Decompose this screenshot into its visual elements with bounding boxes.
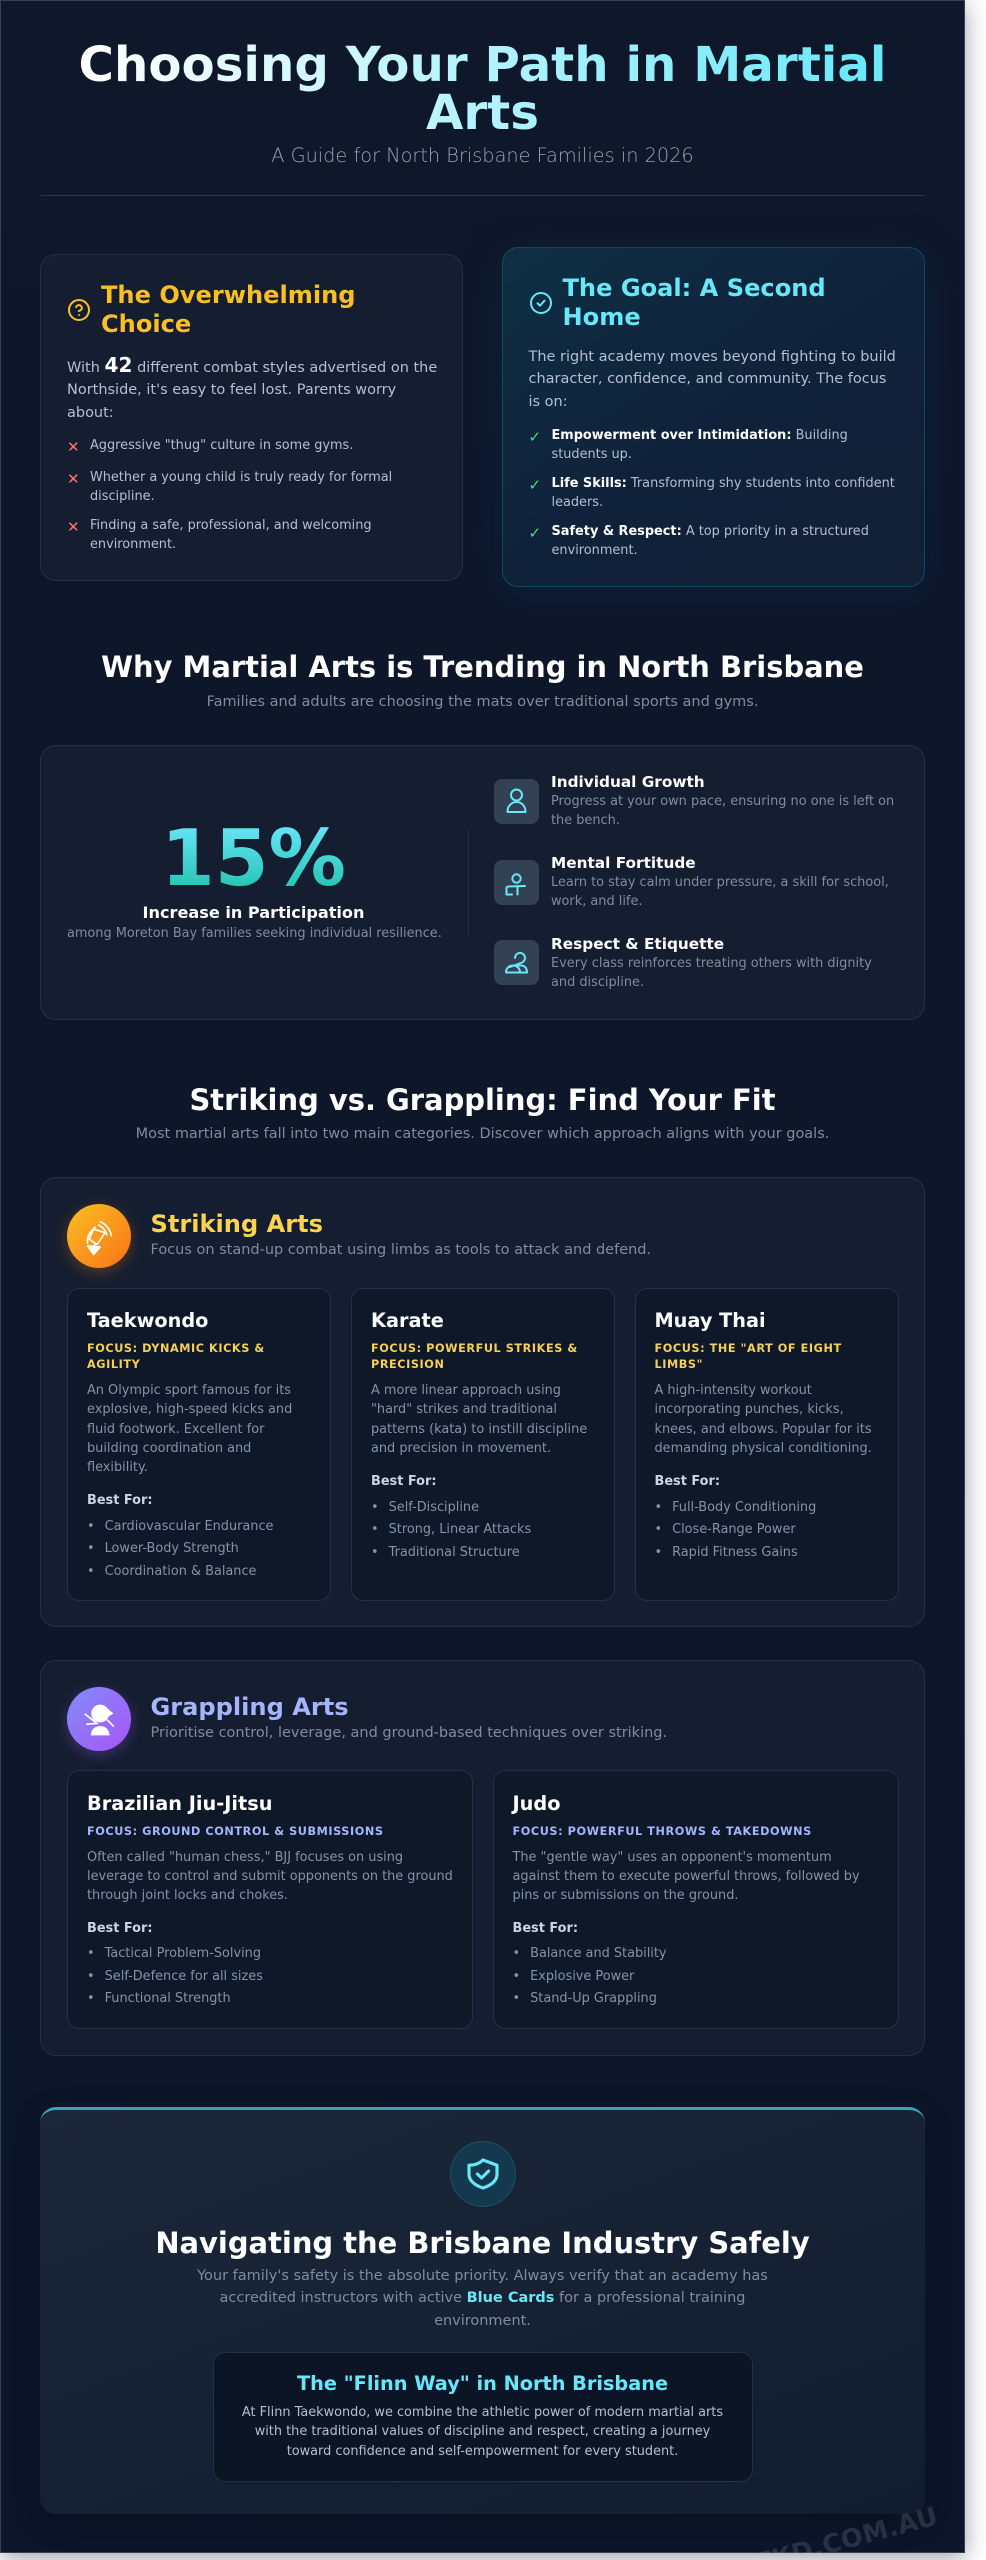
focus [371,1342,578,1371]
intro text: With 42 different combat styles advertised on the [67,353,437,377]
worry 2: ✕ [67,470,80,488]
description: demanding physical conditioning. [654,1441,872,1456]
focus [87,1342,265,1371]
description: against them to execute powerful throws, followed by [512,1869,860,1884]
best-for list: • Close-Range Power [654,1522,796,1537]
worry list [67,438,392,552]
benefit: individual growth: the bench. [551,813,620,828]
subtitle: A Guide for North Brisbane Families in 2026 [271,144,694,167]
card: brazilian jiu-jitsu [67,1770,472,2029]
benefit 1: ✓ [528,428,541,446]
intro text: The right academy moves beyond fighting to build [528,349,896,365]
worry 1: ✕ [67,438,80,456]
section subtitle: Families and adults are choosing the mats over traditional sports and gyms. [207,694,758,710]
description: leverage to control and submit opponents on the ground [87,1869,453,1884]
benefit 2: leaders. [552,495,603,510]
panel: trending stats [40,745,925,1020]
description: and precision in movement. [371,1441,551,1456]
benefit 3: Safety & Respect: A top priority in a structured [552,524,869,539]
icon: shield check [450,2141,516,2207]
statistic: 15% [67,810,440,906]
art name: Judo [512,1792,560,1815]
art name: Brazilian Jiu-Jitsu [87,1792,272,1815]
callout text: toward confidence and self-empowerment for every student. [287,2444,678,2459]
best for: Best For: [87,1920,152,1936]
icon: individual growth [494,779,539,824]
benefit: respect and etiquette: and discipline. [551,975,644,990]
category heading: Striking Arts [150,1210,323,1238]
title: Choosing Your Path in Martial [78,36,886,92]
best-for list: • Rapid Fitness Gains [654,1544,798,1560]
benefit 1: Empowerment over Intimidation: Building [552,428,848,443]
benefit 1 [528,428,848,462]
heading [562,274,826,331]
focus: AGILITY [87,1358,140,1371]
best-for list: • Self-Defence for all sizes [87,1968,263,1984]
intro text: Northside, it's easy to feel lost. Parents worry [67,382,396,398]
benefit 3: ✓ [528,524,541,542]
description: Often called "human chess," BJJ focuses on using [87,1850,403,1864]
callout: the flinn way [212,2352,752,2482]
best-for list [512,1946,667,2006]
best-for list: • Full-Body Conditioning [654,1500,816,1514]
best for: Best For: [512,1920,578,1936]
benefit 1: students up. [552,447,632,462]
focus: FOCUS: THE "ART OF EIGHT [654,1342,842,1355]
icon: grappling figures [67,1687,131,1751]
benefit 2: Life Skills: Transforming shy students into confident [552,476,895,491]
description: The "gentle way" uses an opponent's momentum [512,1850,832,1864]
stat note: among Moreton Bay families seeking individual resilience. [67,926,442,941]
worry 3 [67,518,372,552]
benefit: individual growth: Progress at your own pace, ensuring no one is left on [551,794,894,809]
worry 2: Whether a young child is truly ready for formal [90,470,392,484]
focus [654,1342,842,1371]
best-for list: • Lower-Body Strength [87,1541,239,1556]
best-for list: • Functional Strength [87,1991,231,2006]
description [512,1850,860,1903]
safety text: environment. [434,2313,531,2329]
worry 1: Aggressive "thug" culture in some gyms. [90,438,353,452]
panel: safety [40,2107,925,2514]
benefit 3: environment. [552,543,638,558]
card: muay thai [634,1288,899,1601]
heading: Home [562,303,641,331]
heading: Navigating the Brisbane Industry Safely [155,2226,810,2260]
best-for list: • Tactical Problem-Solving [87,1946,261,1961]
heading: The Goal: A Second [562,274,826,302]
callout text [242,2405,723,2459]
best-for list: • Coordination & Balance [87,1564,256,1578]
best-for list: • Strong, Linear Attacks [371,1522,531,1537]
description: flexibility. [87,1460,148,1475]
title: Arts [426,85,539,141]
best for: Best For: [654,1474,720,1488]
icon: mental fortitude [494,860,539,905]
heading: Choice [101,310,191,338]
best-for list: • Traditional Structure [371,1544,520,1560]
focus: FOCUS: GROUND CONTROL & SUBMISSIONS [87,1825,384,1838]
description: incorporating punches, kicks, [654,1402,844,1417]
description: "hard" strikes and traditional [371,1402,557,1417]
panel: the goal [502,247,925,587]
best-for list: • Explosive Power [512,1968,634,1984]
intro text: is on: [528,394,568,410]
description: knees, and elbows. Popular for its [654,1422,872,1437]
heading: why trending: Why Martial Arts is Trending in North Brisbane [101,650,864,684]
benefit: respect and etiquette: Respect & Etiquette [551,935,724,953]
worry 2 [67,470,392,504]
intro text [67,353,437,421]
panel: striking arts [40,1177,925,1627]
safety text: Your family's safety is the absolute priority. Always verify that an academy has [197,2268,768,2284]
icon: striking kick [67,1204,131,1268]
safety text [197,2268,768,2329]
focus: FOCUS: DYNAMIC KICKS & [87,1342,265,1355]
worry 2: discipline. [90,489,155,504]
best-for list: • Self-Discipline [371,1500,479,1514]
stat label: Increase in Participation [143,903,364,922]
best-for list: • Stand-Up Grappling [512,1991,657,2006]
focus: FOCUS: POWERFUL STRIKES & [371,1342,578,1355]
benefit 3 [528,524,869,558]
section subtitle: Most martial arts fall into two main categories. Discover which approach aligns with your goals. [136,1126,829,1142]
callout text: with the traditional values of discipline and respect, creating a journey [255,2424,710,2439]
card: karate [351,1288,614,1601]
worry 3: ✕ [67,518,80,536]
benefit: individual growth: Individual Growth [551,773,705,791]
icon: check circle [530,292,552,314]
heading: The Overwhelming [101,281,356,309]
callout text: At Flinn Taekwondo, we combine the athletic power of modern martial arts [242,2405,723,2420]
panel: grappling arts [40,1660,925,2056]
card: judo [492,1770,899,2029]
description [654,1383,872,1456]
art name: Karate [371,1309,444,1332]
description: patterns (kata) to instill discipline [371,1422,587,1437]
benefit: individual growth [551,773,894,828]
benefit: respect and etiquette: Every class reinforces treating others with dignity [551,956,872,971]
art name: Muay Thai [654,1309,766,1332]
best-for list: • Balance and Stability [512,1946,667,1961]
description: pins or submissions on the ground. [512,1888,738,1903]
focus: FOCUS: POWERFUL THROWS & TAKEDOWNS [512,1825,812,1838]
description: A high-intensity workout [654,1383,812,1398]
benefit: respect and etiquette [551,935,872,990]
worry 3: Finding a safe, professional, and welcoming [90,518,372,532]
best-for list [654,1500,816,1560]
best-for list [371,1500,531,1560]
best-for list [87,1518,273,1578]
title [0,40,965,137]
description: through joint locks and chokes. [87,1888,288,1903]
benefit list [528,428,895,558]
best for: Best For: [371,1474,436,1488]
description: fluid footwork. Excellent for [87,1422,264,1437]
focus: LIMBS" [654,1358,703,1371]
best for: Best For: [87,1492,152,1508]
description [87,1850,453,1903]
safety text: accredited instructors with active Blue Cards for a professional training [220,2290,745,2306]
benefit 2 [528,476,895,510]
description [87,1383,292,1475]
benefit: mental fortitude: Mental Fortitude [551,854,696,872]
benefit 2: ✓ [528,476,541,494]
benefit: mental fortitude [551,854,889,909]
art name: Taekwondo [87,1309,208,1332]
benefit: mental fortitude: work, and life. [551,894,642,909]
icon: question circle [68,299,90,321]
description: building coordination and [87,1441,251,1456]
statistic: 15%: 15% [161,814,346,904]
description: A more linear approach using [371,1383,561,1398]
best-for list: • Cardiovascular Endurance [87,1518,273,1534]
category description: Prioritise control, leverage, and ground-based techniques over striking. [150,1725,667,1741]
heading [101,281,356,338]
heading: striking vs grappling: Striking vs. Grappling: Find Your Fit [189,1083,776,1117]
icon: respect and etiquette [494,940,539,985]
intro text: about: [67,405,114,421]
description: An Olympic sport famous for its [87,1383,291,1398]
panel: the overwhelming choice [40,254,462,581]
focus: PRECISION [371,1358,444,1371]
callout heading: The "Flinn Way" in North Brisbane [297,2372,668,2395]
benefit: mental fortitude: Learn to stay calm under pressure, a skill for school, [551,875,889,890]
category heading: Grappling Arts [150,1693,349,1721]
best-for list [87,1946,263,2006]
worry 3: environment. [90,537,176,552]
description: explosive, high-speed kicks and [87,1402,292,1417]
description [371,1383,587,1456]
category description: Focus on stand-up combat using limbs as tools to attack and defend. [150,1242,651,1258]
card: taekwondo [67,1288,331,1601]
intro text [528,349,896,410]
intro text: character, confidence, and community. The focus [528,371,886,387]
